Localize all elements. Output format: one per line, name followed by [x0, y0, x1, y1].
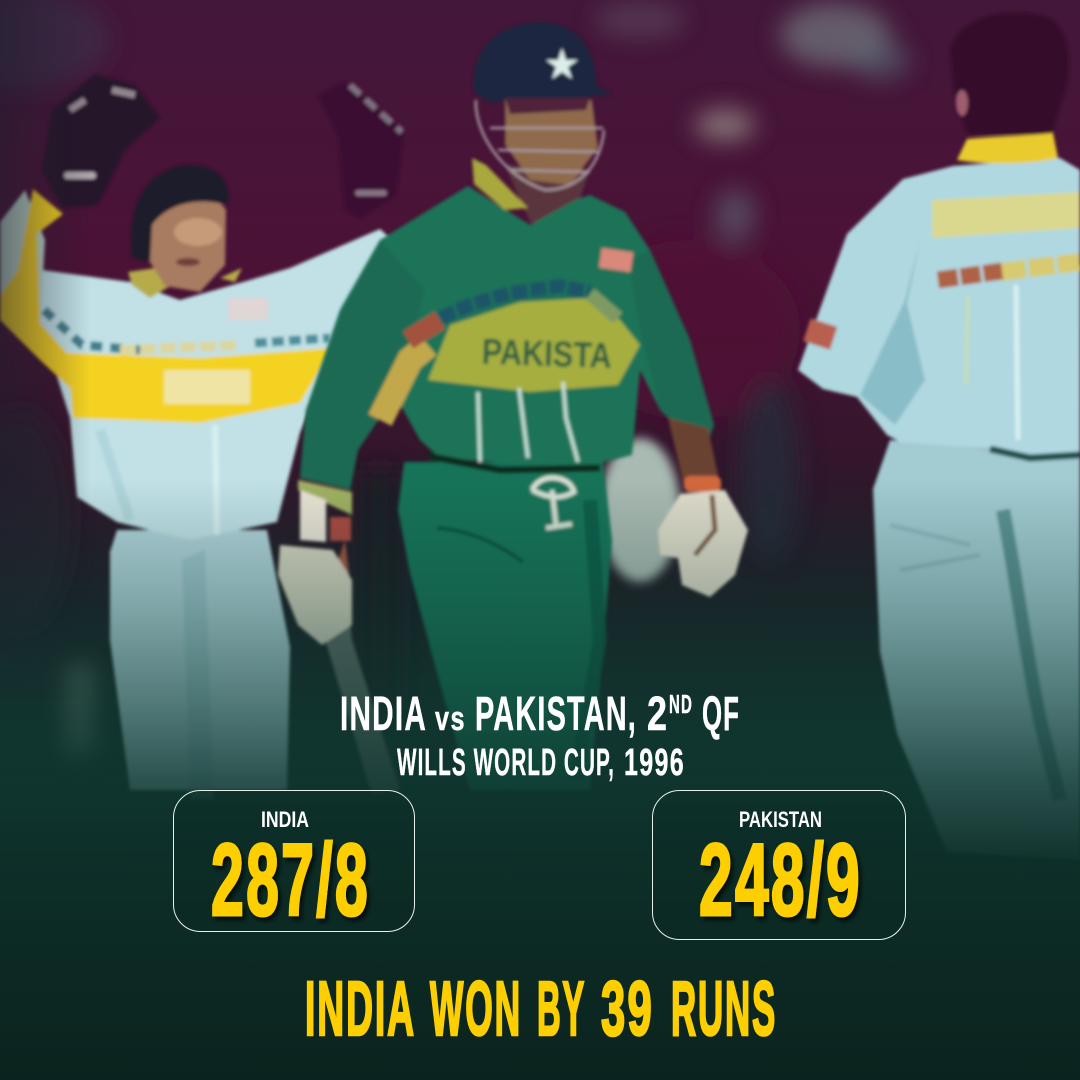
batsman helmet: [474, 22, 612, 102]
fielder yellow collar: [957, 133, 1058, 164]
keeper face: [150, 198, 226, 292]
tournament subtitle: WILLS WORLD CUP,: [397, 742, 615, 784]
batsman collar: [472, 158, 528, 210]
batsman right glove: [658, 490, 748, 597]
result headline: 39: [601, 966, 654, 1052]
fielder shirt stripes: [1016, 285, 1018, 440]
score card: India: [174, 790, 414, 937]
batsman waistband: [428, 456, 600, 470]
keeper yellow band: [67, 348, 333, 423]
keeper trousers: [110, 530, 290, 790]
team label: India: INDIA: [261, 807, 309, 832]
batsman chest lettering: PAKISTA: [481, 331, 613, 376]
keeper shirt: [40, 229, 392, 540]
score: Pakistan: 248/9: [699, 823, 862, 937]
batsman drawstring: [532, 478, 574, 528]
photo: wicketkeeper celebrating (left): [0, 74, 404, 800]
infographic canvas: RUNS: [671, 966, 777, 1052]
fielder waist: [990, 449, 1080, 458]
keeper chest lettering: [164, 370, 250, 404]
team label: Pakistan: PAKISTAN: [739, 807, 822, 832]
keeper shirt folds: [215, 425, 217, 535]
batsman wristband: [684, 476, 721, 492]
fielder back lettering: [932, 192, 1080, 238]
result headline: BY: [537, 966, 586, 1052]
fielder head: [950, 13, 1069, 135]
score: India: 287/8: [211, 823, 370, 937]
keeper sleeve base: [0, 190, 45, 325]
pale blob behind batsman: [600, 438, 680, 582]
batsman face: [505, 100, 598, 185]
batsman forearm: [668, 418, 720, 485]
keeper left glove: [42, 74, 160, 208]
fielder sleeve patch: [803, 318, 837, 350]
batsman chevron band: [440, 286, 590, 318]
keeper chevrons: [44, 310, 140, 350]
batsman shirt stripes: [478, 382, 578, 462]
batsman shirt: [300, 186, 714, 490]
fielder shirt fold: [860, 239, 925, 425]
keeper yellow sleeve: [0, 189, 72, 390]
blurred crowd backdrop: [0, 0, 910, 755]
batsman trousers: [398, 462, 612, 790]
photo: fielder running away (right): [798, 13, 1080, 860]
result headline: [305, 966, 777, 1052]
match title: 2: [647, 688, 667, 741]
left edge tint: [0, 0, 90, 700]
match title: ND: [669, 689, 693, 719]
photo: Pakistan batsman (centre): [278, 22, 748, 795]
fielder shirt: [798, 158, 1080, 460]
tournament subtitle: 1996: [624, 742, 685, 784]
match title: QF: [702, 688, 740, 741]
batsman yellow band: [428, 298, 640, 392]
score card: Pakistan: [652, 790, 906, 940]
keeper collar: [128, 268, 172, 298]
batsman left cuff: [298, 480, 352, 515]
match title: PAKISTAN,: [475, 688, 637, 741]
keeper sponsor patch: [228, 298, 268, 320]
batsman bat: [322, 575, 400, 795]
batsman neck: [505, 165, 590, 232]
match title: [340, 688, 740, 741]
result headline: INDIA: [305, 966, 416, 1052]
fielder trousers: [873, 440, 1080, 860]
match title: INDIA: [340, 688, 427, 741]
match title: vs: [435, 700, 466, 738]
result headline: WON: [430, 966, 522, 1052]
fielder trouser seam: [1003, 510, 1060, 800]
batsman grille: [476, 100, 604, 190]
keeper cap: [131, 165, 229, 262]
keeper right glove: [318, 82, 404, 218]
bottom green fade: [0, 480, 1080, 1080]
batsman star: [546, 48, 578, 79]
batsman sponsor patch: [599, 248, 633, 272]
batsman left glove: [278, 545, 352, 645]
fielder chevron band: [1000, 262, 1080, 272]
